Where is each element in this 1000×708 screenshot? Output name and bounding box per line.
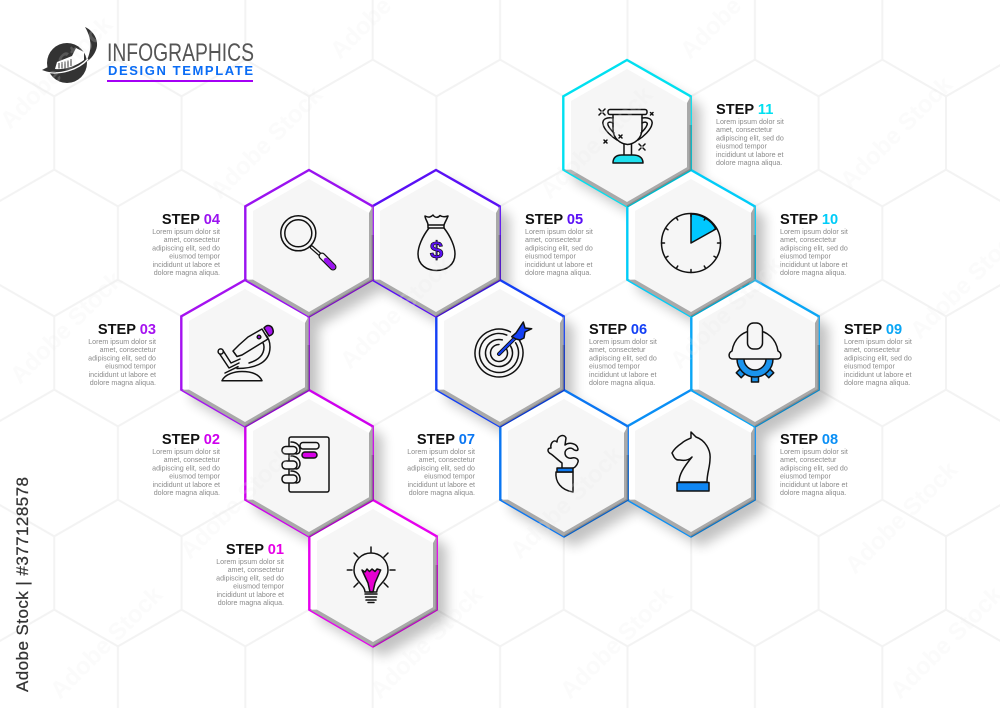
label: step 07 — [407, 432, 476, 497]
label: step 09: Lorem ipsum dolor sit — [844, 338, 912, 346]
watermark text: Adobe Stock — [205, 81, 328, 204]
label: step 09: eiusmod tempor — [844, 363, 895, 371]
watermark text: Adobe Stock — [335, 251, 458, 374]
label: step 01: Lorem ipsum dolor sit — [216, 558, 284, 566]
label: step 06: dolore magna aliqua. — [589, 379, 655, 387]
label: step 11: dolore magna aliqua. — [716, 159, 782, 167]
label: step 07: eiusmod tempor — [424, 473, 476, 481]
label: step 03: STEP 03 — [98, 322, 156, 338]
watermark text: Adobe Stock — [835, 71, 958, 194]
label: step 10: Lorem ipsum dolor sit — [780, 228, 848, 236]
label: step 01: dolore magna aliqua. — [218, 599, 284, 607]
label: step 03: adipiscing elit, sed do — [88, 354, 156, 362]
label: step 05: amet, consectetur — [525, 236, 582, 244]
label: step 08: Lorem ipsum dolor sit — [780, 448, 848, 456]
label: step 06 — [589, 322, 657, 387]
label: step 07: Lorem ipsum dolor sit — [407, 448, 475, 456]
label: step 08: incididunt ut labore et — [780, 481, 847, 489]
label: step 11: amet, consectetur — [716, 126, 773, 134]
label: step 09: dolore magna aliqua. — [844, 379, 910, 387]
label: step 04: STEP 04 — [162, 212, 221, 228]
label: step 05: incididunt ut labore et — [525, 261, 592, 269]
label: step 05: eiusmod tempor — [525, 253, 576, 261]
label: step 02: Lorem ipsum dolor sit — [152, 448, 220, 456]
step 08 hexagon and icon: chess knight — [627, 390, 755, 536]
step 04 hexagon and icon: magnifier — [245, 170, 373, 316]
label: step 04: Lorem ipsum dolor sit — [152, 228, 220, 236]
label: step 05: Lorem ipsum dolor sit — [525, 228, 593, 236]
label: step 01: STEP 01 — [226, 542, 284, 558]
label: step 02: adipiscing elit, sed do — [152, 464, 220, 472]
step 05 hexagon and icon: money bag: $ — [430, 237, 444, 264]
watermark text: Adobe Stock — [535, 81, 658, 204]
label: step 07: STEP 07 — [417, 432, 475, 448]
label: step 08: amet, consectetur — [780, 456, 837, 464]
label: step 07: dolore magna aliqua. — [409, 489, 475, 497]
label: step 04: eiusmod tempor — [169, 253, 221, 261]
label: step 04 — [152, 212, 221, 277]
label: step 10: incididunt ut labore et — [780, 261, 847, 269]
label: step 04: incididunt ut labore et — [153, 261, 220, 269]
label: step 10: adipiscing elit, sed do — [780, 244, 848, 252]
step 01 hexagon and icon: light bulb — [309, 500, 437, 646]
label: step 03: incididunt ut labore et — [89, 371, 156, 379]
step 03 hexagon and icon: microscope — [181, 280, 309, 426]
label: step 05 — [525, 212, 593, 277]
label: step 10 — [780, 212, 848, 277]
label: step 02 — [152, 432, 221, 497]
logo icon — [42, 27, 97, 83]
label: step 03: amet, consectetur — [100, 346, 157, 354]
label: step 01: adipiscing elit, sed do — [216, 574, 284, 582]
step 02 hexagon and icon: notebook — [245, 390, 373, 536]
label: step 06: eiusmod tempor — [589, 363, 640, 371]
label: step 03: dolore magna aliqua. — [90, 379, 156, 387]
watermark text: Adobe Stock — [45, 581, 168, 704]
label: step 10: eiusmod tempor — [780, 253, 831, 261]
watermark text: Adobe Stock — [840, 456, 963, 579]
label: step 03: eiusmod tempor — [105, 363, 157, 371]
label: step 05: dolore magna aliqua. — [525, 269, 591, 277]
label: step 07: amet, consectetur — [419, 456, 476, 464]
label: step 01: amet, consectetur — [228, 566, 285, 574]
logo title: INFOGRAPHICS — [107, 39, 254, 67]
label: step 01: eiusmod tempor — [233, 583, 285, 591]
label: step 09: adipiscing elit, sed do — [844, 354, 912, 362]
step 07 hexagon and icon: hand ok sign — [500, 390, 628, 536]
step 09 hexagon and icon: helmet and gear — [691, 280, 819, 426]
label: step 06: STEP 06 — [589, 322, 647, 338]
label: step 02: eiusmod tempor — [169, 473, 221, 481]
label: step 08: adipiscing elit, sed do — [780, 464, 848, 472]
step 11 hexagon and icon: trophy — [563, 60, 691, 206]
step 10 hexagon and icon: clock — [627, 170, 755, 316]
watermark text: Adobe Stock — [555, 581, 678, 704]
label: step 08: eiusmod tempor — [780, 473, 831, 481]
label: step 02: amet, consectetur — [164, 456, 221, 464]
label: step 05: adipiscing elit, sed do — [525, 244, 593, 252]
label: step 03 — [88, 322, 157, 387]
label: step 06: adipiscing elit, sed do — [589, 354, 657, 362]
label: step 06: amet, consectetur — [589, 346, 646, 354]
label: step 11: incididunt ut labore et — [716, 151, 783, 159]
label: step 11: Lorem ipsum dolor sit — [716, 118, 784, 126]
label: step 05: STEP 05 — [525, 212, 583, 228]
watermark text: Adobe Stock — [665, 251, 788, 374]
logo underline — [107, 80, 253, 82]
label: step 04: dolore magna aliqua. — [154, 269, 220, 277]
label: step 11 — [716, 102, 784, 167]
label: step 08: dolore magna aliqua. — [780, 489, 846, 497]
label: step 06: incididunt ut labore et — [589, 371, 656, 379]
label: step 06: Lorem ipsum dolor sit — [589, 338, 657, 346]
label: step 01: incididunt ut labore et — [217, 591, 284, 599]
label: step 09: STEP 09 — [844, 322, 902, 338]
label: step 01 — [216, 542, 285, 607]
label: step 03: Lorem ipsum dolor sit — [88, 338, 156, 346]
label: step 11: adipiscing elit, sed do — [716, 134, 784, 142]
label: step 08 — [780, 432, 848, 497]
logo subtitle: DESIGN TEMPLATE — [108, 63, 253, 78]
label: step 09: amet, consectetur — [844, 346, 901, 354]
label: step 07: adipiscing elit, sed do — [407, 464, 475, 472]
watermark text: Adobe Stock — [175, 441, 298, 564]
watermark text: Adobe Stock — [505, 441, 628, 564]
label: step 08: STEP 08 — [780, 432, 838, 448]
label: step 09 — [844, 322, 912, 387]
label: step 11: eiusmod tempor — [716, 143, 767, 151]
soft hexagon shadows — [191, 70, 829, 656]
step 06 hexagon and icon: target with arrow — [436, 280, 564, 426]
label: step 10: amet, consectetur — [780, 236, 837, 244]
label: step 11: STEP 11 — [716, 102, 773, 118]
label: step 04: amet, consectetur — [164, 236, 221, 244]
label: step 02: STEP 02 — [162, 432, 220, 448]
label: step 04: adipiscing elit, sed do — [152, 244, 220, 252]
step 05 hexagon and icon: money bag — [372, 170, 500, 316]
label: step 02: incididunt ut labore et — [153, 481, 220, 489]
label: step 02: dolore magna aliqua. — [154, 489, 220, 497]
watermark text: Adobe Stock — [365, 581, 488, 704]
label: step 10: STEP 10 — [780, 212, 838, 228]
watermark text: Adobe Stock — [5, 266, 128, 389]
side stock credit: Adobe Stock | #377128578 — [13, 477, 32, 692]
label: step 09: incididunt ut labore et — [844, 371, 911, 379]
label: step 07: incididunt ut labore et — [408, 481, 475, 489]
label: step 10: dolore magna aliqua. — [780, 269, 846, 277]
